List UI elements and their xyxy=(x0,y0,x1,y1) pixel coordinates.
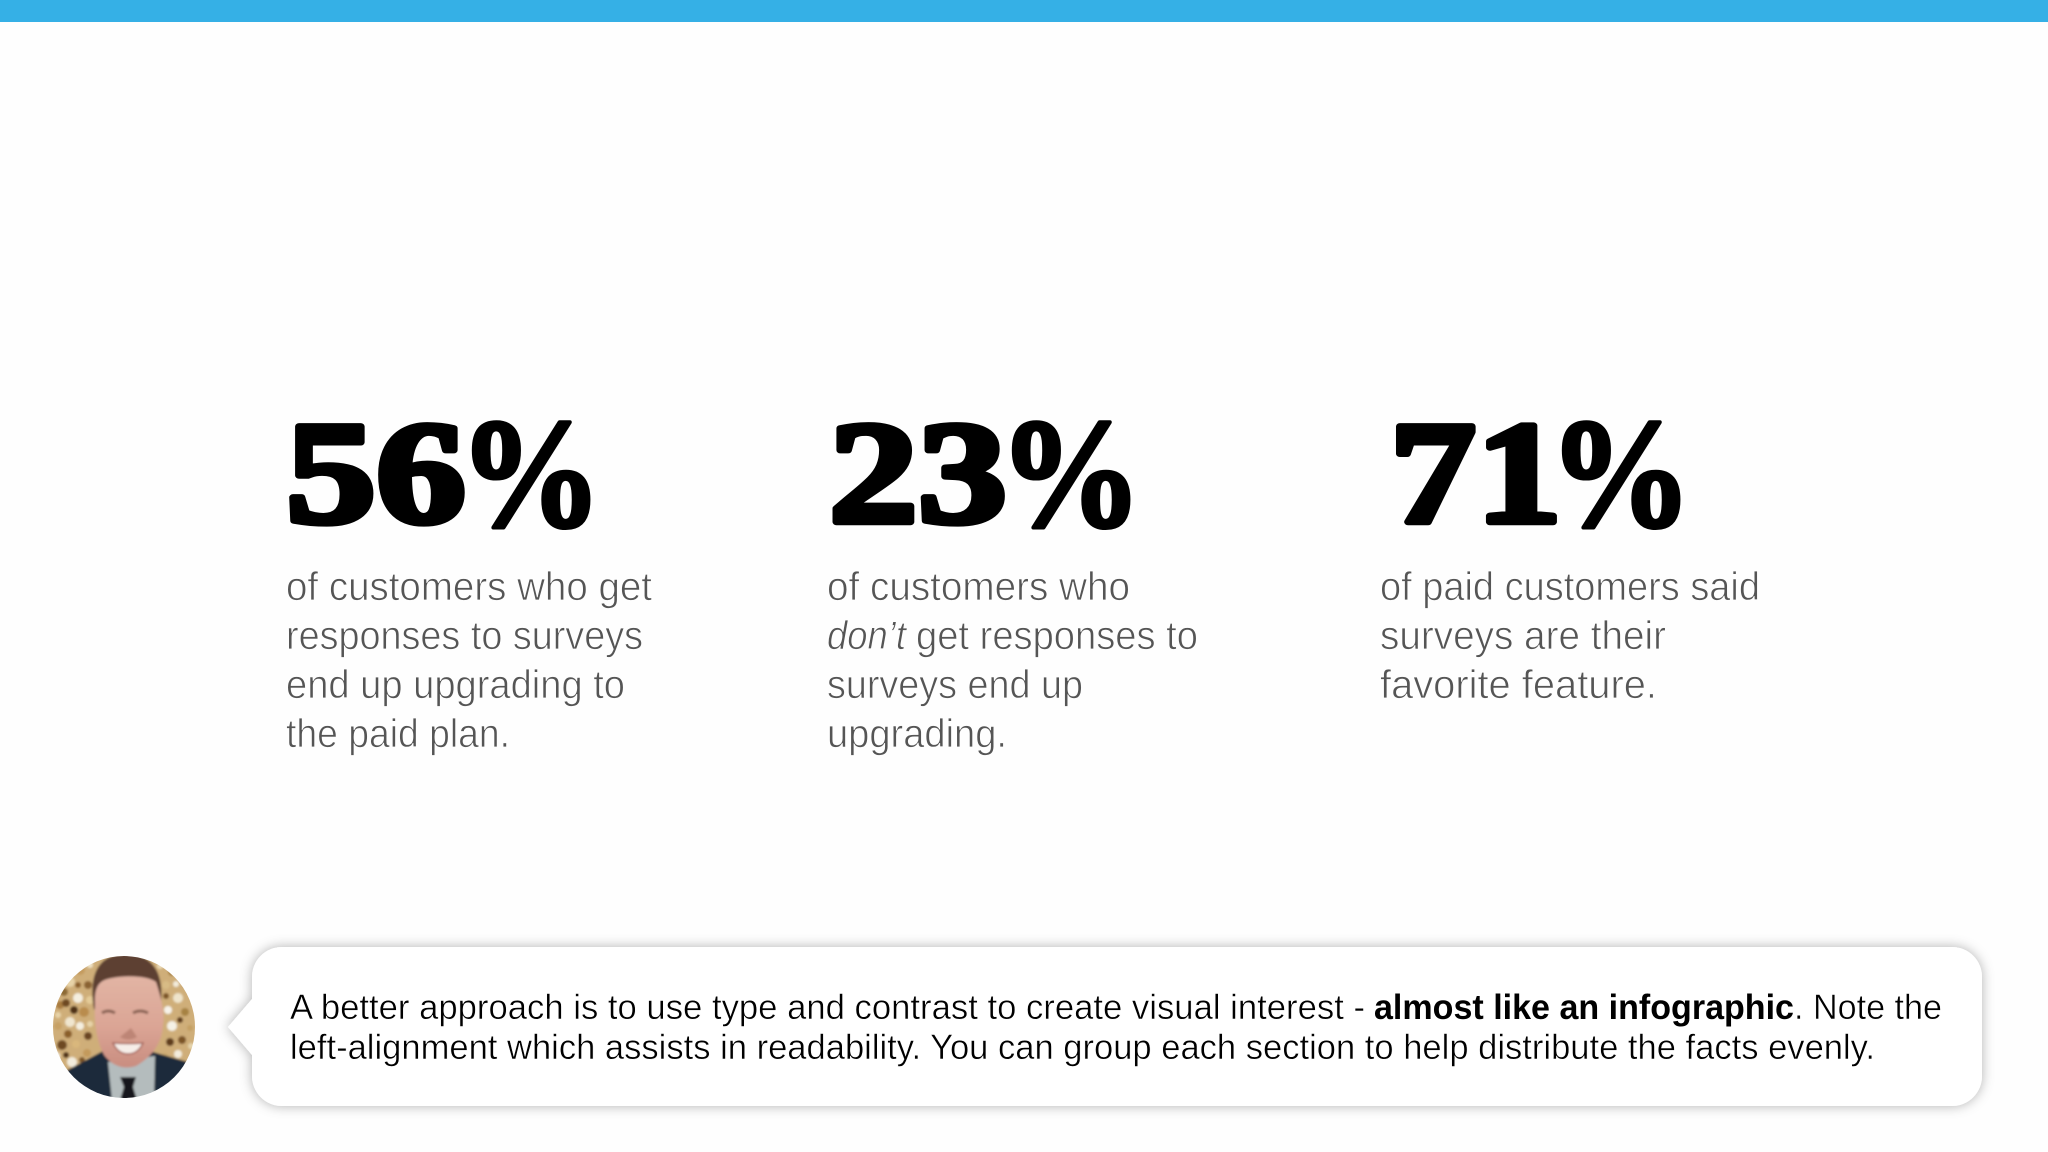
stat number: 71% xyxy=(1390,387,1692,560)
stat description: 23%: of customers who xyxy=(827,565,1130,609)
stat column: 56% xyxy=(286,387,652,756)
stat description: 71%: of paid customers said xyxy=(1380,565,1760,609)
tie xyxy=(120,1077,137,1100)
stat description: 23%: don’t xyxy=(827,614,908,658)
stat number: 71%: % xyxy=(1549,387,1692,560)
callout text: almost like an infographic xyxy=(1374,987,1794,1027)
stat number: 23%: % xyxy=(999,387,1142,560)
stat description: 56%: end up upgrading to xyxy=(286,663,625,707)
stat number: 23%: 23 xyxy=(829,392,1007,554)
stat number: 56% xyxy=(286,387,602,560)
stat number: 71%: 71 xyxy=(1390,392,1562,554)
stat description: 56% xyxy=(286,565,652,756)
stat number: 56%: % xyxy=(459,387,602,560)
stat description: 71% xyxy=(1380,565,1760,707)
smile xyxy=(113,1043,143,1054)
stat description: 56%: of customers who get xyxy=(286,565,652,609)
stat description: 23%: surveys end up xyxy=(827,663,1083,707)
callout text: left-alignment which assists in readability. You can group each section to help distribute the facts evenly. xyxy=(290,1027,1875,1067)
callout text: . Note the xyxy=(1794,987,1942,1027)
speech bubble xyxy=(228,947,1982,1106)
stat column: 71% xyxy=(1380,387,1760,707)
stat number: 56%: 56 xyxy=(286,392,466,554)
stat description: 23%: upgrading. xyxy=(827,712,1007,756)
callout text xyxy=(290,987,1942,1067)
callout text: A better approach is to use type and contrast to create visual interest - xyxy=(290,987,1365,1027)
nose shadow xyxy=(120,1028,137,1040)
stat number: 23% xyxy=(829,387,1142,560)
stat column: 23% xyxy=(827,387,1198,756)
shirt xyxy=(108,1056,155,1100)
stat description: 71%: favorite feature. xyxy=(1380,663,1657,707)
eyes xyxy=(102,1011,148,1013)
icon: presenter avatar xyxy=(53,956,195,1098)
stat description: 71%: surveys are their xyxy=(1380,614,1666,658)
stat description: 23% xyxy=(827,565,1198,756)
suit xyxy=(67,1050,186,1098)
stat description: 56%: the paid plan. xyxy=(286,712,510,756)
face xyxy=(95,976,164,1068)
top accent bar xyxy=(0,0,2048,22)
stat description: 23%: get responses to xyxy=(916,614,1198,658)
stat description: 56%: responses to surveys xyxy=(286,614,643,658)
hair xyxy=(92,954,162,1010)
